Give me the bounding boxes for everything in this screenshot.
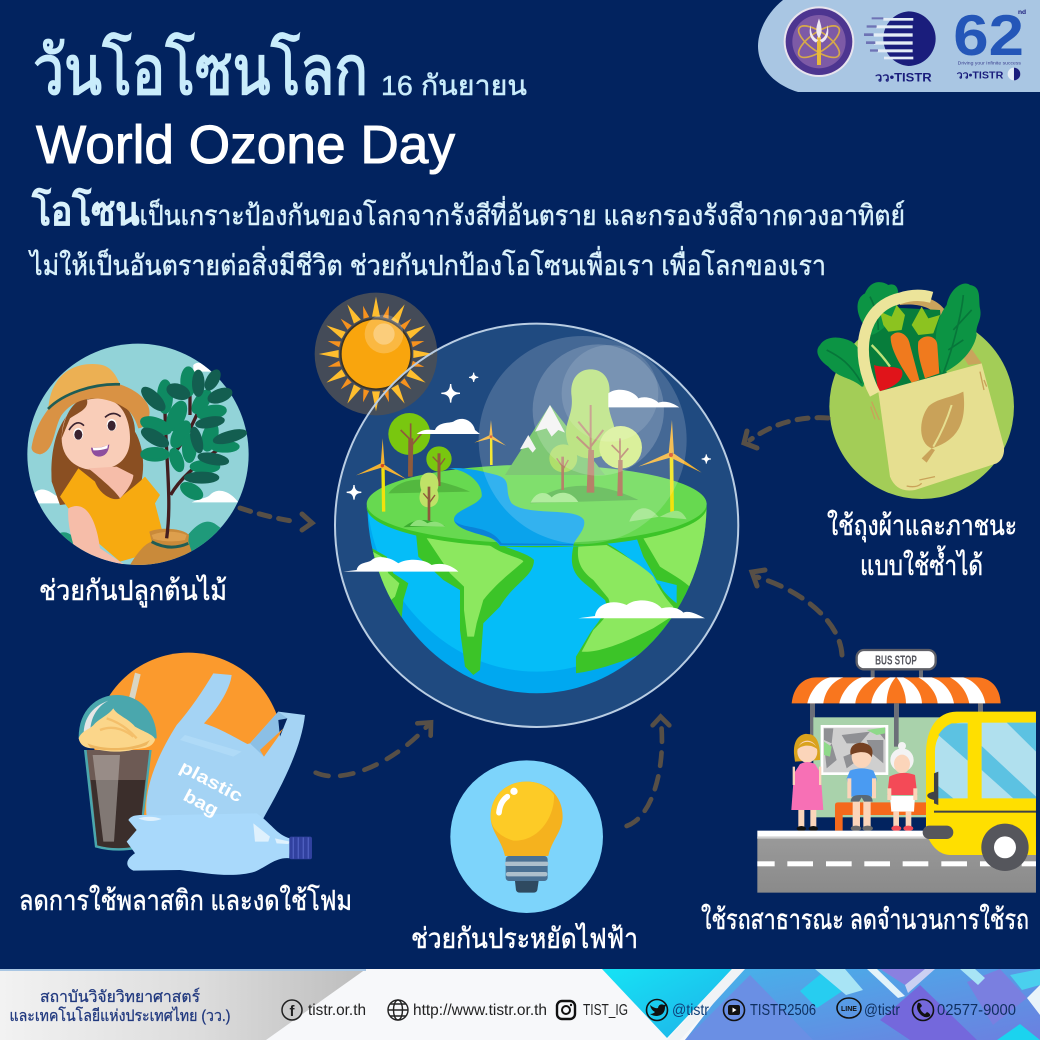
- person: grandmother: [887, 742, 917, 831]
- contact: phone: 02577-9000: [937, 1002, 1016, 1019]
- arrow: plastic to earth: [316, 722, 431, 776]
- organisation name: [10, 987, 230, 1025]
- logo panel: [758, 0, 1040, 92]
- footer: [0, 969, 1040, 1040]
- logo: 62nd anniversary: 62: [953, 4, 1024, 68]
- contact: youtube: TISTR2506: [750, 1002, 816, 1019]
- illustration: girl with sapling: [27, 344, 249, 568]
- land plateau: [367, 467, 707, 547]
- contact: instagram: [557, 1001, 628, 1019]
- illustration: cup, plastic bag, bottle: plastic: [176, 757, 246, 806]
- contact: instagram: TIST_IG: [583, 1002, 628, 1019]
- label: [827, 509, 1017, 581]
- trees: [388, 369, 687, 527]
- panel: public transport: [701, 650, 1036, 935]
- wind turbines: [356, 420, 702, 513]
- contact: website: [388, 1000, 547, 1020]
- person: girl: [791, 734, 823, 831]
- logo: institute seal: [784, 6, 854, 77]
- bus: [926, 712, 1036, 855]
- panel: save electricity: [411, 760, 638, 954]
- contact: facebook: tistr.or.th: [308, 1002, 366, 1019]
- label: แบบใช้ซ้ำได้: [860, 545, 983, 581]
- illustration: cup, plastic bag, bottle: bag: [180, 785, 222, 820]
- contact: line: LINE: [841, 1006, 857, 1013]
- decorative triangles: [602, 969, 1040, 1040]
- contact: line: @tistr: [864, 1002, 901, 1019]
- panel: plant trees: [27, 344, 249, 608]
- contact: facebook: f: [290, 1003, 296, 1020]
- illustration: light bulb: [450, 760, 603, 913]
- organisation name: สถาบันวิจัยวิทยาศาสตร์: [40, 987, 200, 1006]
- arrow: bag to earth: [744, 418, 828, 448]
- organisation name: และเทคโนโลยีแห่งประเทศไทย (วว.): [10, 1006, 230, 1025]
- plastic bag: [146, 673, 305, 818]
- panel: reduce plastic and foam: [19, 653, 352, 916]
- illustration: cup, plastic bag, bottle: [79, 653, 312, 875]
- sun: [315, 293, 437, 415]
- arrow: bus to earth: [752, 570, 842, 655]
- title: English: World Ozone Day: [36, 115, 455, 175]
- contact: youtube: [724, 1000, 816, 1020]
- ozone bubble highlights: [479, 336, 687, 544]
- label: ช่วยกันประหยัดไฟฟ้า: [411, 923, 638, 954]
- logo: 62nd anniversary: nd: [1018, 9, 1026, 16]
- logo: TISTR: วว•TISTR: [875, 70, 932, 84]
- contact: twitter: [646, 1000, 710, 1020]
- road: [757, 831, 927, 839]
- date: 16 กันยายน: [381, 70, 527, 101]
- stars: [347, 373, 711, 500]
- arrow: trees to earth: [240, 508, 312, 530]
- clouds: [343, 390, 705, 618]
- logo: 62nd anniversary: Driving your Infinite success: [958, 61, 1021, 66]
- label: ลดการใช้พลาสติก และงดใช้โฟม: [19, 884, 352, 916]
- contact: website: http://www.tistr.or.th: [413, 1002, 547, 1019]
- contact: line: [837, 998, 901, 1019]
- arrow: electricity to earth: [627, 717, 669, 826]
- mountains: [505, 405, 605, 475]
- illustration: bus stop: BUS STOP: [875, 654, 917, 668]
- intro text line 1: โอโซนเป็นเกราะป้องกันของโลกจากรังสีที่อันตราย และกรองรังสีจากดวงอาทิตย์: [31, 188, 905, 234]
- continents: [363, 503, 708, 675]
- plastic bottle: [127, 813, 290, 875]
- illustration: bus stop: [757, 650, 1036, 893]
- label: ช่วยกันปลูกต้นไม้: [39, 575, 227, 608]
- panel: reusable bags: [817, 282, 1017, 581]
- intro text line 2: ไม่ให้เป็นอันตรายต่อสิ่งมีชีวิต ช่วยกันปกป้องโอโซนเพื่อเรา เพื่อโลกของเรา: [28, 246, 826, 281]
- leaf emblem: [921, 392, 964, 448]
- logo: 62nd anniversary: วว•TISTR: [957, 71, 1003, 82]
- logo: TISTR: [864, 11, 936, 84]
- earth illustration: [315, 293, 738, 727]
- contact: facebook: [282, 1000, 366, 1020]
- illustration: shopping bag: [817, 282, 1014, 499]
- river: [447, 468, 584, 546]
- contact: twitter: @tistr: [672, 1002, 710, 1019]
- contact: phone: [912, 1000, 1016, 1020]
- title: Thai: วันโอโซนโลก: [33, 32, 368, 109]
- bench: [835, 802, 930, 831]
- person: boy: [847, 743, 877, 831]
- ocean hemisphere: [367, 503, 707, 693]
